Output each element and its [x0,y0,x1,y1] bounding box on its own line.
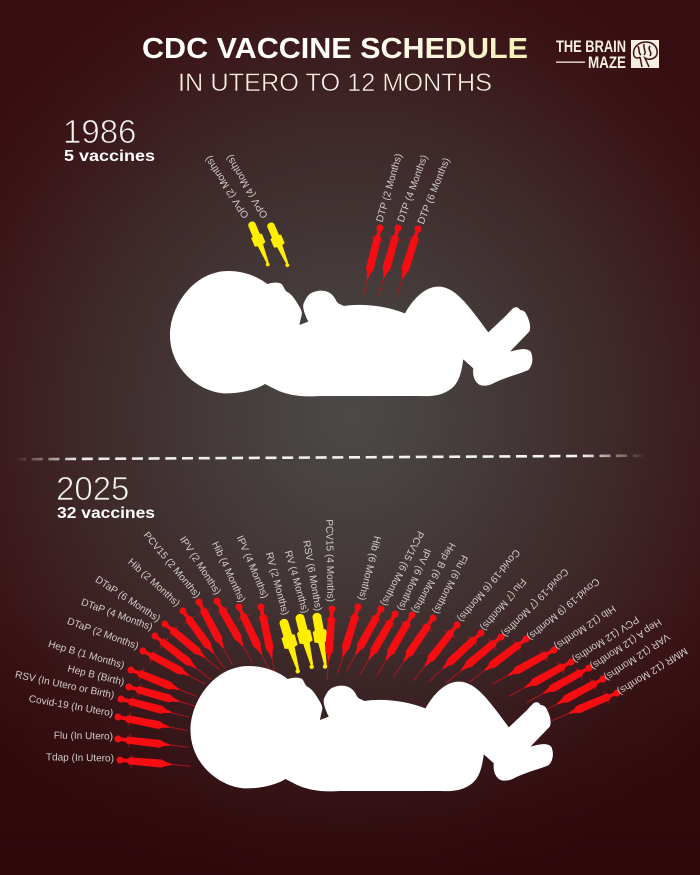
syringe: DTP 4 months [372,154,430,298]
syringe: Flu 6 months: Flu (6 Months) [430,553,469,615]
title: CDC VACCINE SCHEDULE [142,33,528,65]
syringe: Hib 12 months: Hib (12 Months) [552,602,617,652]
syringe: Covid-19 6 months [408,547,522,685]
baby silhouette 2025 [190,666,553,791]
syringe: PCV15 6 months [341,529,425,674]
syringe: PCV 12 months [506,613,641,702]
syringe: Tdap: Tdap (In Utero) [46,752,114,764]
syringe: PCV 12 months: PCV (12 Months) [570,613,641,665]
syringe: Hep A 12 months [524,616,663,708]
syringe: Hib 6 months [331,535,382,677]
syringe: PCV15 2 months [141,530,238,668]
syringe: DTaP 2 months [65,616,209,690]
syringe: Covid-19 in utero [28,694,189,737]
divider [15,456,645,459]
count: 5 vaccines: 5 vaccines [64,148,155,165]
syringe: Hib 4 months [209,540,276,674]
syringe: MMR 12 months: MMR (12 Months) [615,645,689,697]
syringe: Hep B birth: Hep B (Birth) [66,664,125,688]
syringe: Hib 2 months: Hib (2 Months) [125,557,182,609]
syringe: Hep B 1 month: Hep B (1 Months) [47,639,126,671]
syringe: PCV15 6 months: PCV15 (6 Months) [378,529,425,607]
syringe: VAR 12 months: VAR (12 Months) [602,631,671,683]
syringe: RSV in utero or birth [14,670,191,724]
syringe: DTP 2 months [357,152,405,298]
background bottom shade [0,600,700,875]
syringe: IPV 6 months: IPV (6 Months) [395,547,432,612]
syringe: MMR 12 months [549,645,689,727]
syringe: Covid-19 9 months: Covid-19 (9 Months) [524,575,601,642]
dropper: OPV 2 months [203,154,274,268]
1986 doses [203,152,453,299]
syringe: DTP 2 months: DTP (2 Months) [375,152,405,224]
dropper: RSV 6 months: RSV (6 Months) [300,540,323,612]
dropper: RV 4 months: RV (4 Months) [282,549,310,615]
subtitle: IN UTERO TO 12 MONTHS [178,69,492,97]
syringe: Hep B 1 month [47,639,199,703]
syringe: Covid-19 9 months [466,575,601,687]
syringe: RSV in utero or birth: RSV (In Utero or Birth) [14,670,115,701]
syringe: DTP 6 months: DTP (6 Months) [416,156,453,226]
syringe: IPV 4 months [234,534,282,678]
count: 32 vaccines: 32 vaccines [57,505,155,522]
syringe: Tdap [46,752,191,773]
logo: The Brain Maze [556,38,659,72]
dropper: OPV 2 months: OPV (2 Months) [203,154,252,220]
syringe: Covid-19 6 months: Covid-19 (6 Months) [455,547,522,624]
syringe: PCV15 4 months: PCV15 (4 Months) [323,519,335,602]
syringe: Flu 6 months [388,553,469,680]
syringe: DTP 6 months [390,156,453,299]
syringe: IPV 2 months: IPV (2 Months) [177,535,223,597]
syringe: IPV 4 months: IPV (4 Months) [234,534,270,600]
syringe: PCV15 4 months [321,519,339,680]
dropper: RSV 6 months [300,540,333,670]
syringe: IPV 2 months [177,535,258,666]
syringe: Flu in utero: Flu (In Utero) [54,730,113,742]
syringe: Hib 6 months: Hib (6 Months) [356,535,382,601]
syringe: Flu in utero [54,730,189,754]
year: 1986: 1986 [63,113,136,150]
syringe: Hep A 12 months: Hep A (12 Months) [588,616,663,672]
syringe: Flu 7 months: Flu (7 Months) [478,576,528,633]
syringe: IPV 6 months [354,547,432,679]
dropper: OPV 4 months [224,152,294,269]
syringe: Hep B 6 months: Hep B (6 Months) [409,540,457,615]
logo: The Brain Maze: THE BRAIN [556,38,626,56]
syringe: DTaP 6 months: DTaP (6 Months) [93,574,162,625]
syringe: Flu 7 months [425,576,528,686]
syringe: Hib 12 months [489,602,617,690]
syringe: VAR 12 months [538,631,671,719]
year: 2025: 2025 [56,470,129,507]
syringe: DTaP 6 months [93,574,224,675]
syringe: Covid-19 in utero: Covid-19 (In Utero) [28,694,114,719]
syringe: DTaP 4 months: DTaP (4 Months) [79,597,154,633]
syringe: Hep B birth [66,664,199,713]
syringe: Covid-19 7 months: Covid-19 (7 Months) [499,566,570,639]
syringe: DTaP 4 months [79,597,215,685]
syringe: Hib 2 months [125,557,230,672]
baby silhouette 1986 [170,271,532,396]
2025 doses [14,519,689,773]
dropper: RV 4 months [282,549,320,670]
syringe: DTaP 2 months: DTaP (2 Months) [65,616,140,652]
dropper: RV 2 months: RV (2 Months) [263,551,290,616]
syringe: PCV15 2 months: PCV15 (2 Months) [141,530,202,601]
logo: The Brain Maze: MAZE [588,54,626,72]
syringe: Hep B 6 months [371,540,457,680]
dropper: RV 2 months [263,551,306,675]
syringe: Covid-19 7 months [442,566,570,688]
dropper: OPV 4 months: OPV (4 Months) [224,152,271,220]
syringe: DTP 4 months: DTP (4 Months) [396,154,430,224]
syringe: Hib 4 months: Hib (4 Months) [209,540,247,604]
